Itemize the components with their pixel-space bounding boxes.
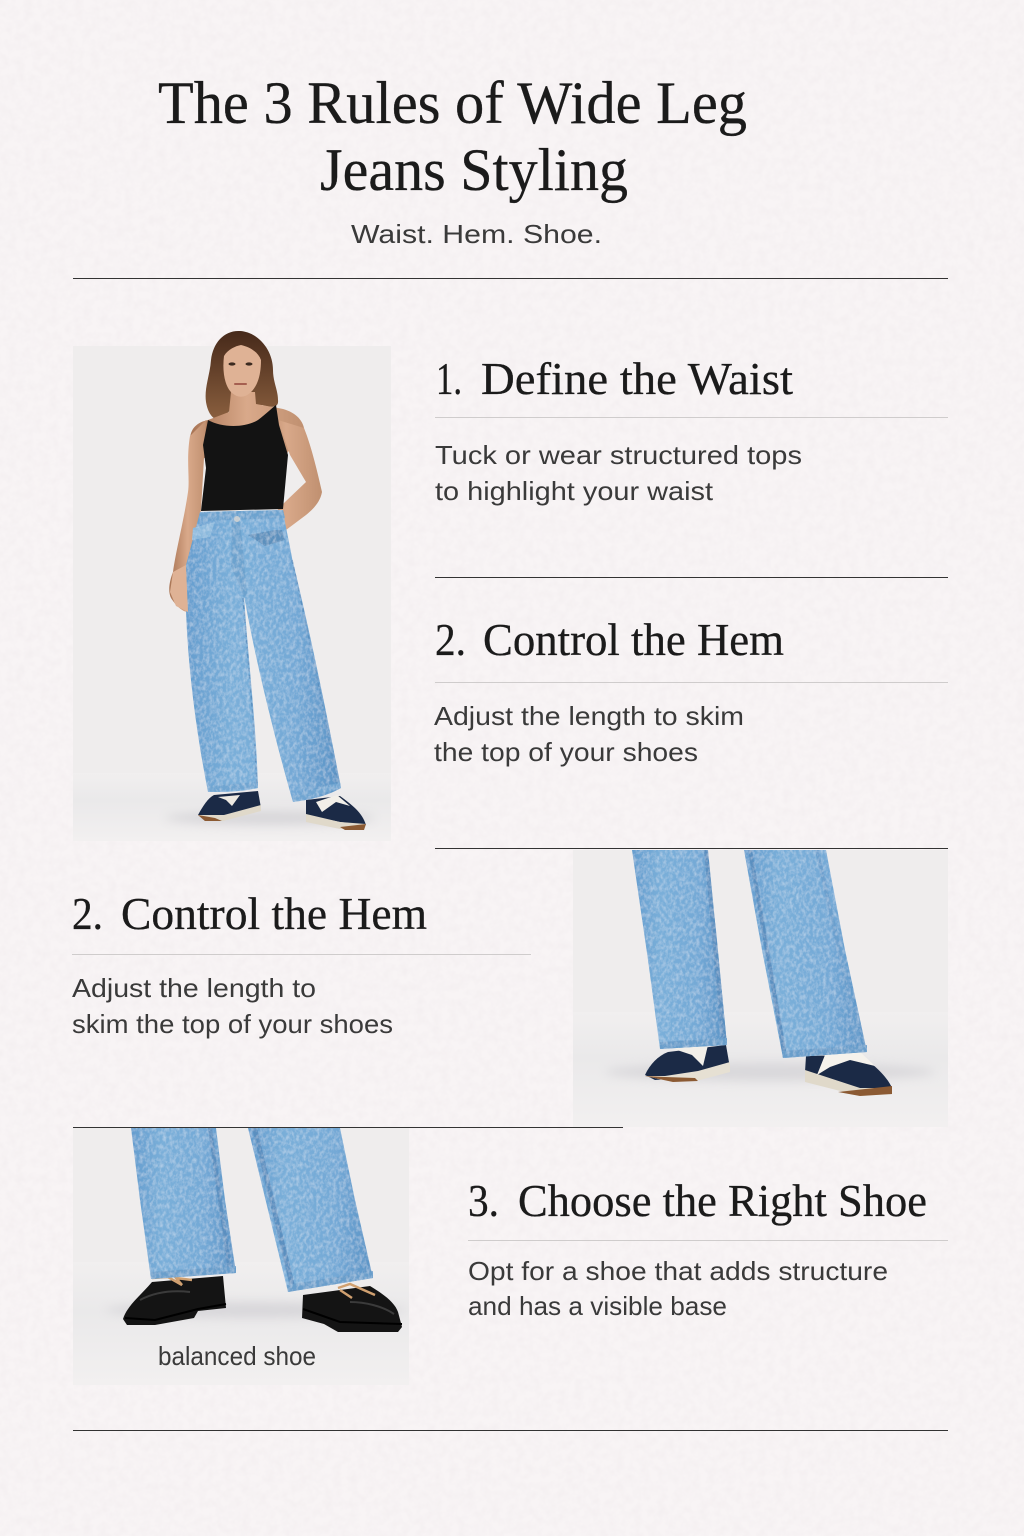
body text [434,701,744,767]
figure: neck and shoulders [190,392,304,458]
caption: balanced shoe [158,1341,316,1371]
figure: hand [170,565,188,612]
heading: Control the Hem [483,614,784,665]
jeans legs [131,1128,373,1292]
title: The 3 Rules of Wide Leg [158,70,747,136]
jeans legs [632,850,867,1058]
panel: balanced shoe close-up [73,1128,409,1385]
title [158,70,747,203]
body text: Opt for a shoe that adds structure [468,1256,888,1286]
heading: 1. [436,353,462,404]
body text: Tuck or wear structured tops [435,440,802,470]
body text [72,973,393,1039]
body text: the top of your shoes [434,737,698,767]
body text: skim the top of your shoes [72,1009,393,1039]
figure: left arm [169,420,206,612]
figure: right sneaker [306,795,366,830]
body text: to highlight your waist [435,476,714,506]
section: control the hem, right [434,614,948,767]
heading: Control the Hem [121,888,427,939]
heading: 2. [72,888,103,939]
figure: face [223,345,261,397]
body text: and has a visible base [468,1291,727,1321]
section: choose the right shoe [468,1175,948,1321]
figure: facial features [228,362,252,385]
figure: hair [206,331,278,420]
figure: right arm [250,420,322,536]
panel: full-length photo of woman in wide leg jeans [73,331,391,841]
subtitle: Waist. Hem. Shoe. [351,219,602,249]
section: control the hem, left [72,888,531,1039]
right sneaker [805,1050,892,1096]
left loafer [123,1276,226,1325]
left sneaker [645,1045,730,1082]
figure: left sneaker [198,791,261,821]
figure: black tank top [201,405,288,511]
title: Jeans Styling [320,137,628,203]
heading: 2. [435,614,466,665]
body text: Adjust the length to [72,973,316,1003]
body text [435,440,802,506]
body text: Adjust the length to skim [434,701,744,731]
figure: wide leg jeans [186,510,341,802]
right loafer [302,1284,402,1332]
heading: Define the Waist [481,353,793,404]
heading: 3. [468,1175,499,1226]
section: define the waist [435,353,948,506]
body text [468,1256,888,1321]
panel: hem close-up with sneakers [573,850,948,1127]
heading: Choose the Right Shoe [518,1175,927,1226]
